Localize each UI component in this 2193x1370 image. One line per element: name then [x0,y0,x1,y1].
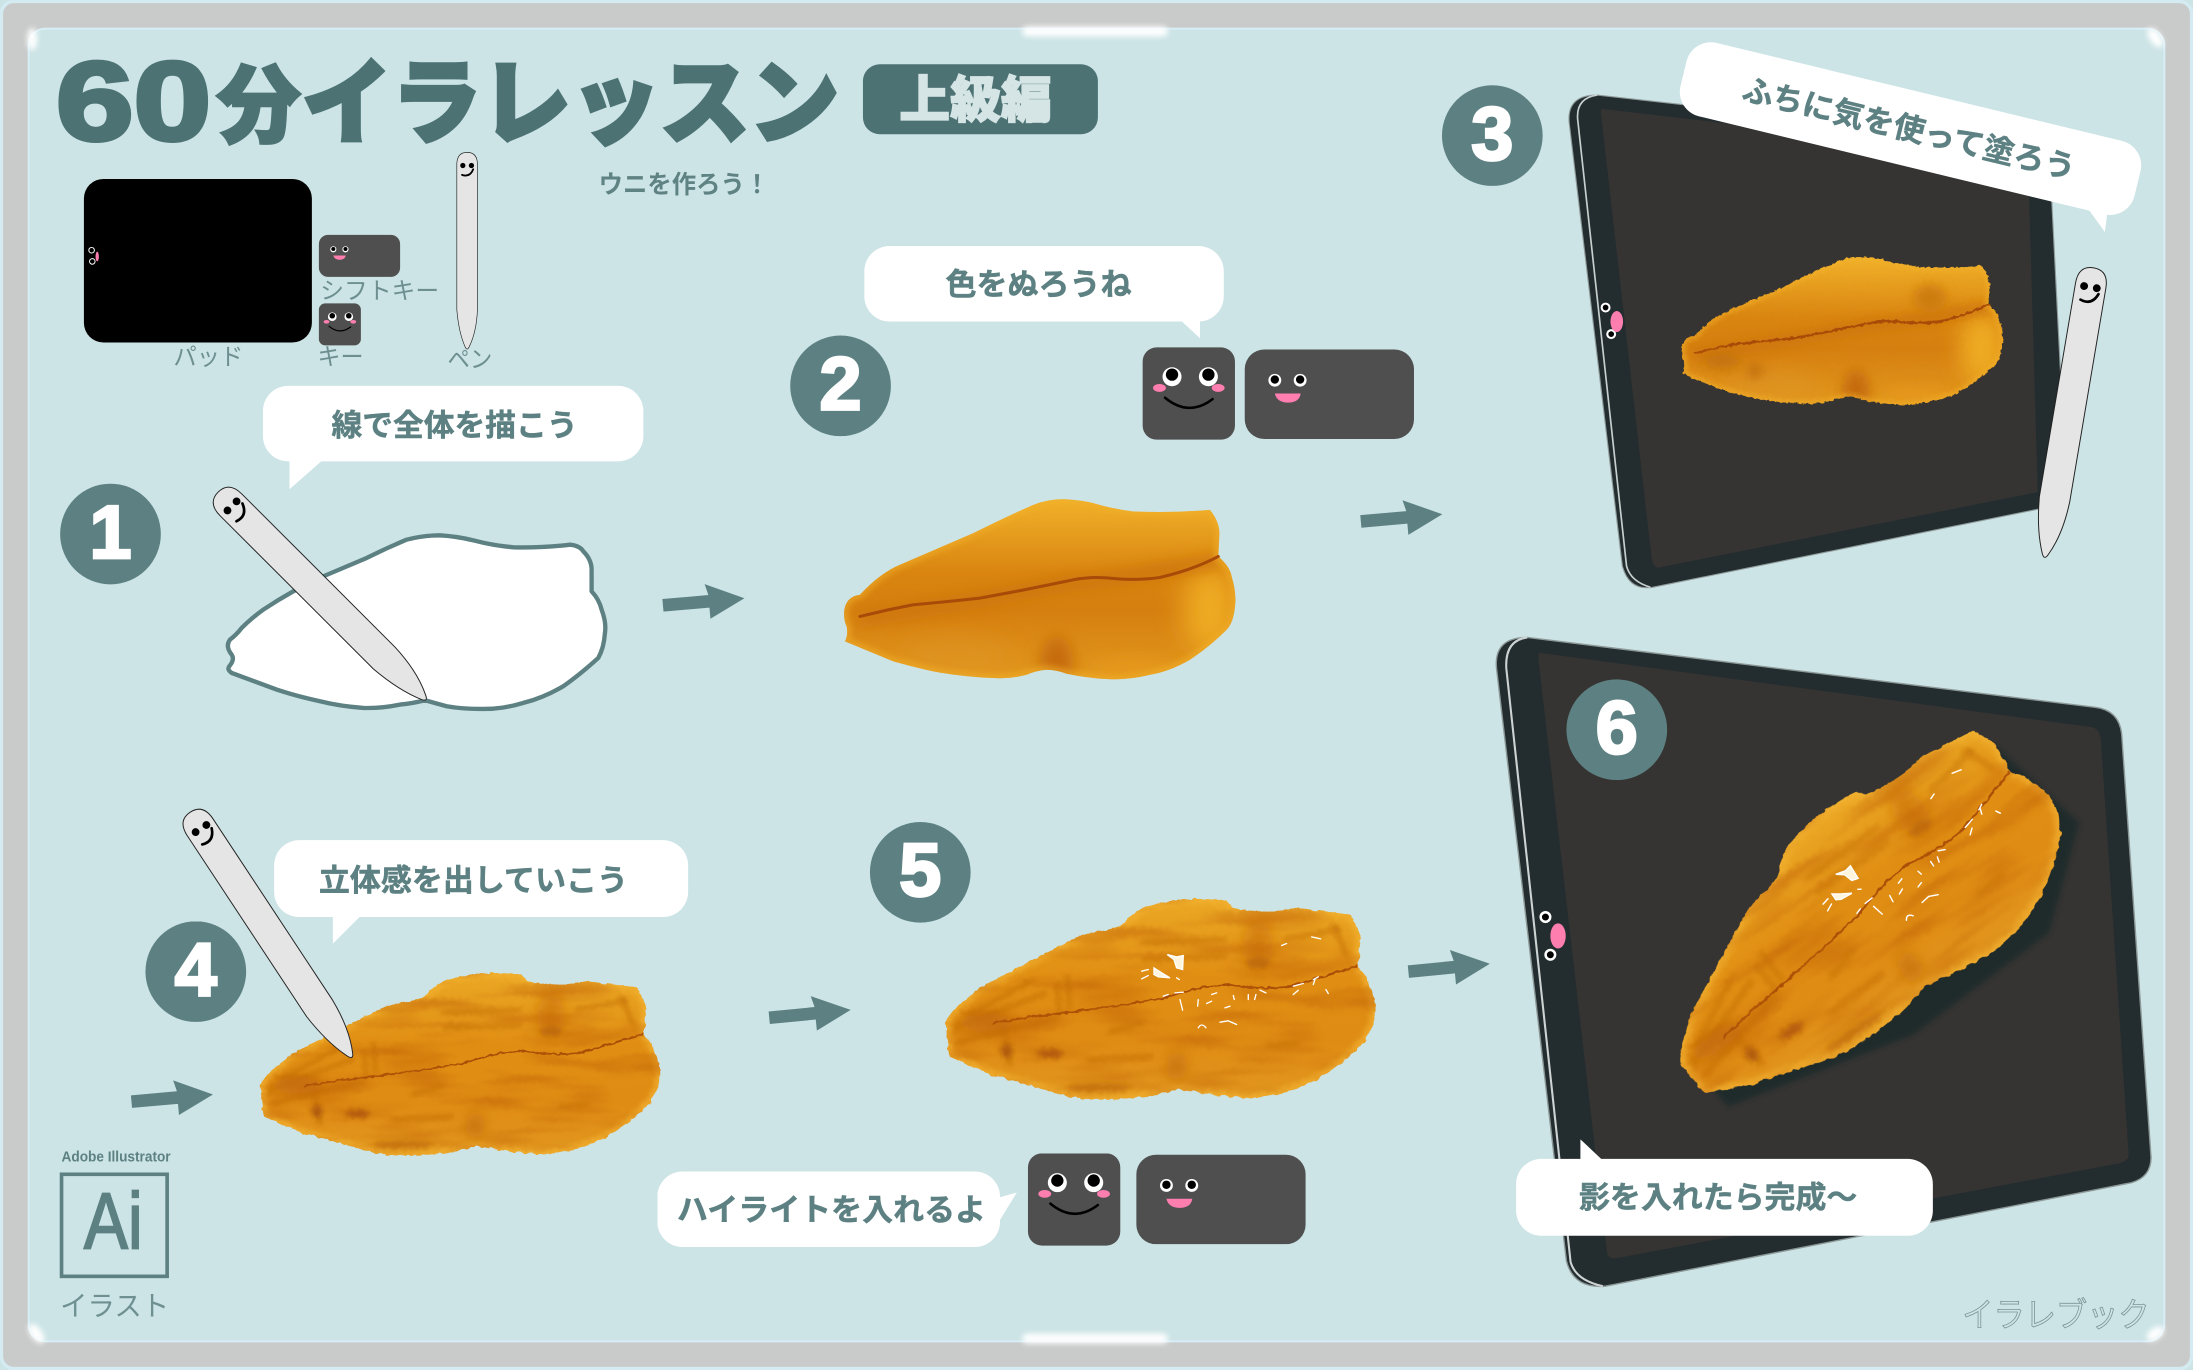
step 5 number: 5 [899,828,941,912]
arrow [661,581,746,623]
Adobe Illustrator logo [60,1150,171,1321]
step 4 sea urchin [249,968,667,1162]
step 4 bubble [274,840,688,944]
step 4 pen [177,804,365,1066]
legend: shift key [319,235,439,305]
step 5 key characters [1028,1153,1306,1246]
arrow [1407,946,1492,989]
step 2 bubble [864,246,1224,338]
legend: pen: ペン [448,347,492,374]
step 6 number: 6 [1596,686,1638,769]
step 6 tablet [1496,637,2151,1286]
step 2 sea urchin base colour [833,493,1243,690]
legend: pen [448,152,492,374]
legend: key: キー [317,344,364,371]
badge: 上級編: 上級編 [899,71,1052,128]
arrow [768,992,852,1035]
step 3 sea urchin [1681,256,2004,406]
step 2 bubble: 色をぬろうね [945,267,1132,302]
step 1 number [60,484,161,584]
title [56,39,839,164]
badge: 上級編 [863,64,1098,134]
step 3 pen [2030,265,2109,560]
step 6 finished sea urchin with shadow [1594,691,2126,1159]
step 3 tablet [1569,95,2067,588]
title: 分 [217,60,301,154]
step 5 bubble [657,1171,1017,1247]
step 2 key characters [1143,347,1414,440]
step 2 number [790,336,891,436]
legend: pad: パッド [173,344,243,371]
legend: shift key: シフトキー [320,278,439,305]
step 4 number: 4 [175,927,217,1011]
arrow [130,1077,214,1119]
step 5 number [870,822,971,923]
Adobe Illustrator logo: Adobe Illustrator [62,1150,171,1166]
step 5 sea urchin with highlights [933,893,1383,1106]
Adobe Illustrator logo: イラスト [60,1290,169,1321]
step 6 bubble: 影を入れたら完成〜 [1579,1180,1857,1215]
watermark: イラレブック [1962,1297,2150,1335]
step 1 pen [207,481,437,711]
step 1 bubble: 線で全体を描こう [331,408,578,443]
title: イラレッスン [302,52,839,156]
step 1 outline drawing [228,535,605,709]
step 6 number [1566,679,1667,780]
step 4 number [145,921,246,1022]
legend: key [317,303,364,371]
step 4 bubble: 立体感を出していこう [319,863,628,898]
step 3 bubble [1675,37,2146,232]
title: 60 [56,39,211,164]
step 6 bubble [1516,1139,1933,1236]
step 3 number [1442,85,1543,186]
step 3 bubble: ふちに気を使って塗ろう [1739,72,2079,186]
arrow [1359,497,1444,539]
step 2 number: 2 [820,342,862,426]
step 3 number: 3 [1471,91,1513,175]
legend: pad [84,179,312,371]
Adobe Illustrator logo: Ai [84,1176,143,1265]
subtitle: ウニを作ろう！ [599,171,769,199]
step 5 bubble: ハイライトを入れるよ [677,1192,986,1227]
step 1 bubble [263,386,643,489]
step 1 number: 1 [89,490,131,574]
